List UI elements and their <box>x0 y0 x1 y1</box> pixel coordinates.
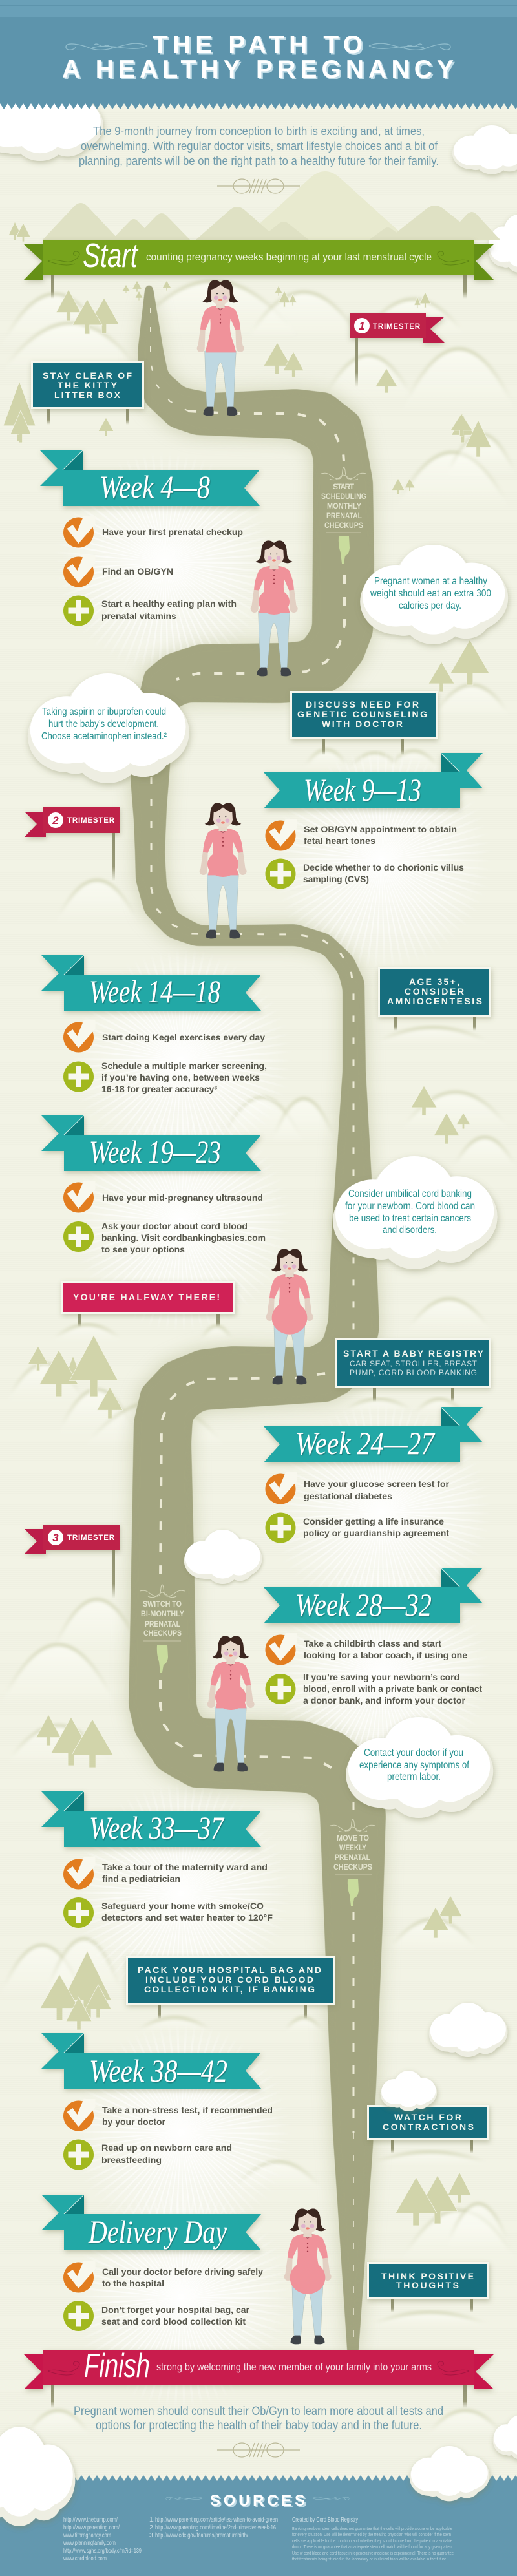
disclaimer: donor. There is no guarantee that an adequate stem cell match will be found for any given patient. <box>292 2544 454 2550</box>
icon: plus <box>63 1221 94 1252</box>
trimester 2 marker: 2 <box>52 814 59 827</box>
trimester 1 marker <box>350 313 445 387</box>
road note: weekly checkups: MOVE TO <box>337 1833 369 1842</box>
task <box>102 2266 263 2288</box>
person: week 9-13 <box>200 803 247 938</box>
trimester 3 marker: 3 <box>52 1532 59 1544</box>
banner: week 28-32: Week 28—32 <box>295 1587 432 1623</box>
icon: plus <box>63 1061 94 1092</box>
road note: bi-monthly checkups: BI-MONTHLY <box>141 1609 184 1618</box>
banner: week 4-8: Week 4—8 <box>100 469 210 505</box>
trees <box>3 222 491 2226</box>
icon: plus <box>265 858 296 889</box>
mountains <box>42 171 501 240</box>
panel: week 33-37 <box>41 1791 273 1928</box>
sign: positive thoughts: THOUGHTS <box>396 2280 459 2290</box>
person: week 4-8 <box>251 540 298 676</box>
sign: genetic counseling <box>291 692 437 755</box>
clouds: bottom <box>0 2415 517 2526</box>
divider ornament <box>217 2443 300 2457</box>
icon: check <box>265 1633 297 1665</box>
task: sampling (CVS) <box>303 874 369 884</box>
sources list: footnotes: http://www.cdc.gov/features/prematurebirth/ <box>155 2531 248 2539</box>
intro text: planning, parents will be on the right path to a healthy future for their family. <box>79 154 439 167</box>
task <box>101 1061 267 1094</box>
road note: monthly checkups: PRENATAL <box>326 511 362 520</box>
finish banner <box>24 2347 494 2408</box>
task: Have your mid-pregnancy ultrasound <box>102 1192 263 1203</box>
trimester 1 marker: 1 <box>359 320 365 332</box>
task: looking for a labor coach, if using one <box>304 1650 467 1660</box>
cloud: aspirin: hurt the baby’s development. <box>48 719 159 730</box>
clouds: near contractions sign <box>381 2003 507 2111</box>
title <box>62 31 454 83</box>
task: breastfeeding <box>101 2155 162 2165</box>
sign: amniocentesis <box>379 968 490 1031</box>
title: THE PATH TO <box>153 31 363 59</box>
header band <box>0 0 517 109</box>
road note: bi-monthly checkups <box>140 1585 185 1673</box>
task: to see your options <box>101 1244 185 1254</box>
person: week 28-32 <box>207 1636 255 1771</box>
sign: hospital bag: PACK YOUR HOSPITAL BAG AND <box>138 1965 321 1975</box>
task <box>101 1901 273 1923</box>
banner: week 33-37: Week 33—37 <box>89 1810 225 1846</box>
task: to the hospital <box>102 2278 164 2288</box>
banner: week 28-32 <box>264 1568 483 1623</box>
panel: delivery day <box>41 2195 263 2331</box>
task: Consider getting a life insurance <box>303 1516 444 1526</box>
task: if you’re having one, between weeks <box>101 1072 260 1082</box>
panel: week 4-8 <box>40 450 260 626</box>
sources list: footnotes: http://www.parenting.com/article/tea-when-to-avoid-green <box>155 2516 278 2524</box>
task: Ask your doctor about cord blood <box>101 1221 248 1231</box>
finish banner: strong by welcoming the new member of your family into your arms <box>156 2361 432 2373</box>
finish banner: Finish <box>84 2347 150 2385</box>
cloud: cord banking: be used to treat certain cancers <box>349 1213 471 1224</box>
icon: check <box>63 1181 96 1212</box>
panel: week 19-23 <box>41 1115 266 1254</box>
sign: genetic counseling: WITH DOCTOR <box>322 719 403 729</box>
task <box>303 1516 449 1538</box>
cloud: calories: calories per day. <box>399 600 461 611</box>
banner: week 24-27 <box>264 1407 483 1462</box>
banner: week 14-18: Week 14—18 <box>89 973 220 1009</box>
footer band <box>0 2475 517 2576</box>
task: Call your doctor before driving safely <box>102 2266 263 2277</box>
start banner: counting pregnancy weeks beginning at your last menstrual cycle <box>146 251 432 263</box>
task <box>303 1672 482 1705</box>
task: blood, enroll with a private bank or contact <box>303 1684 482 1694</box>
disclaimer <box>292 2516 454 2562</box>
sources list: footnotes: 1. <box>149 2516 155 2524</box>
sign: hospital bag: COLLECTION KIT, IF BANKING <box>144 1984 315 1994</box>
road note: monthly checkups: CHECKUPS <box>324 521 363 530</box>
road note: bi-monthly checkups: CHECKUPS <box>143 1629 182 1638</box>
closing text: Pregnant women should consult their Ob/Gyn to learn more about all tests and <box>74 2404 443 2418</box>
task: Take a non-stress test, if recommended <box>102 2105 273 2115</box>
sign: baby registry: START A BABY REGISTRY <box>343 1348 484 1358</box>
task: Decide whether to do chorionic villus <box>303 862 464 872</box>
sign: amniocentesis: CONSIDER <box>405 986 464 997</box>
banner: week 38-42 <box>41 2033 261 2089</box>
sources list: footnotes: 3. <box>149 2531 155 2539</box>
banner: week 19-23: Week 19—23 <box>89 1134 221 1170</box>
task: Don’t forget your hospital bag, car <box>101 2305 250 2315</box>
icon: check <box>63 516 96 548</box>
panel: week 9-13 <box>264 753 483 889</box>
cloud: preterm labor: preterm labor. <box>387 1771 441 1782</box>
sources list: websites: http://www.thebump.com/ <box>63 2516 118 2524</box>
sources list: footnotes <box>149 2516 278 2539</box>
icon: check <box>63 1857 96 1890</box>
cloud: calories: Pregnant women at a healthy <box>374 576 487 587</box>
sign: contractions: WATCH FOR <box>394 2112 461 2122</box>
road note: weekly checkups: CHECKUPS <box>333 1863 372 1872</box>
trimester 1 marker: TRIMESTER <box>373 323 421 331</box>
task: If you’re saving your newborn’s cord <box>303 1672 459 1682</box>
sources list: websites: http://www.parenting.com/ <box>63 2524 120 2531</box>
title: A HEALTHY PREGNANCY <box>62 56 454 83</box>
sign: baby registry: PUMP, CORD BLOOD BANKING <box>350 1368 477 1377</box>
sunbursts behind week lists <box>58 456 488 2404</box>
task: Schedule a multiple marker screening, <box>101 1061 267 1071</box>
task <box>304 1638 467 1660</box>
task: Have your first prenatal checkup <box>102 527 243 537</box>
task <box>101 2142 232 2165</box>
icon: plus <box>63 2139 94 2170</box>
banner: week 19-23 <box>41 1115 261 1171</box>
cloud: cord banking <box>333 1156 498 1269</box>
person: start <box>197 280 244 416</box>
road note: monthly checkups <box>321 467 366 564</box>
trimester 2 marker: TRIMESTER <box>67 817 115 825</box>
sign: amniocentesis: AGE 35+, <box>409 977 459 987</box>
task <box>102 1862 268 1884</box>
cloud: aspirin: Taking aspirin or ibuprofen could <box>42 706 166 717</box>
road dashes <box>151 308 353 2343</box>
sign: hospital bag <box>127 1957 333 2019</box>
road note: bi-monthly checkups: PRENATAL <box>145 1620 180 1629</box>
road note: weekly checkups: PRENATAL <box>335 1853 370 1862</box>
sign: hospital bag: INCLUDE YOUR CORD BLOOD <box>145 1974 313 1985</box>
banner: week 33-37 <box>41 1791 261 1847</box>
task: banking. Visit cordbankingbasics.com <box>101 1232 266 1243</box>
task: Start a healthy eating plan with <box>101 598 237 609</box>
banner: week 38-42: Week 38—42 <box>89 2053 227 2089</box>
intro text: The 9-month journey from conception to birth is exciting and, at times, <box>93 124 425 138</box>
sources heading <box>166 2492 349 2509</box>
cloud: cord banking: for your newborn. Cord blood can <box>345 1201 475 1212</box>
disclaimer: Use of cord blood and cord tissue in regenerative medicine is experimental. There is no guarantee <box>292 2550 454 2556</box>
task <box>304 1479 450 1501</box>
sources list: websites <box>63 2516 142 2562</box>
panel: week 14-18 <box>41 955 267 1094</box>
icon: plus <box>265 1512 296 1543</box>
banner: week 9-13 <box>264 753 483 808</box>
cloud: aspirin <box>28 673 189 783</box>
title flourish left <box>66 43 147 50</box>
task: Start doing Kegel exercises every day <box>102 1032 265 1042</box>
task: by your doctor <box>102 2117 166 2127</box>
clouds: top <box>0 84 517 273</box>
task: Take a childbirth class and start <box>304 1638 441 1649</box>
road note: monthly checkups: MONTHLY <box>327 501 361 511</box>
cloud: calories: weight should eat an extra 300 <box>370 588 491 599</box>
sign: contractions: CONTRACTIONS <box>383 2122 474 2132</box>
task: fetal heart tones <box>304 836 375 846</box>
divider ornament <box>217 179 300 193</box>
disclaimer: Banking newborn stem cells does not guarantee that the cells will provide a cure or be applicable <box>292 2526 452 2531</box>
road note: monthly checkups: SCHEDULING <box>321 492 366 501</box>
sign: genetic counseling: GENETIC COUNSELING <box>297 709 427 719</box>
task: find a pediatrician <box>102 1874 180 1884</box>
intro text <box>79 124 439 167</box>
task: prenatal vitamins <box>101 611 176 621</box>
panel: week 28-32 <box>264 1568 483 1705</box>
task: Take a tour of the maternity ward and <box>102 1862 268 1872</box>
icon: check <box>63 1020 96 1052</box>
task: Safeguard your home with smoke/CO <box>101 1901 264 1911</box>
sources list: websites: www.cordblood.com <box>63 2555 107 2562</box>
sign: kitty litter: STAY CLEAR OF <box>43 370 132 381</box>
icon: plus <box>63 596 94 626</box>
sources list: footnotes: 2. <box>149 2524 155 2531</box>
cloud: calories <box>360 545 508 644</box>
cloud: cord banking: Consider umbilical cord banking <box>348 1188 472 1199</box>
banner: delivery day: Delivery Day <box>88 2213 227 2250</box>
sources list: websites: http://www.sghs.org/body.cfm?id=139 <box>63 2547 142 2555</box>
icon: plus <box>265 1674 296 1704</box>
icon: check <box>63 2261 96 2293</box>
sign: halfway: YOU’RE HALFWAY THERE! <box>73 1292 220 1302</box>
task <box>102 2105 273 2127</box>
sources list: websites: www.planningfamily.com <box>63 2539 116 2547</box>
sources list: websites: www.fitpregnancy.com <box>63 2531 111 2539</box>
closing text <box>74 2404 443 2433</box>
banner: week 14-18 <box>41 955 261 1011</box>
person: delivery <box>284 2208 332 2344</box>
disclaimer: for every situation. Use will be determined by the treating physician who will consider if the stem <box>292 2531 451 2537</box>
disclaimer: Created by Cord Blood Registry <box>292 2516 359 2524</box>
trimester 2 marker <box>25 807 120 881</box>
road shadow <box>129 292 386 2352</box>
task: policy or guardianship agreement <box>303 1528 449 1538</box>
icon: check <box>265 819 297 850</box>
sign: positive thoughts <box>368 2263 489 2312</box>
closing text: options for protecting the health of their baby today and in the future. <box>96 2418 422 2433</box>
disclaimer: that treatments being studied in the laboratory or in clinical trials will be available in the future. <box>292 2556 447 2562</box>
icon: plus <box>63 1897 94 1928</box>
panel: week 24-27 <box>264 1407 483 1543</box>
disclaimer: cells are applicable for the condition and whether they should come from the patient or a suitable <box>292 2538 452 2544</box>
sign: kitty litter: THE KITTY <box>58 380 118 390</box>
icon: plus <box>63 2301 94 2331</box>
sign: positive thoughts: THINK POSITIVE <box>381 2271 474 2281</box>
road note: weekly checkups <box>330 1819 375 1906</box>
task <box>101 598 237 621</box>
trimester 3 marker: TRIMESTER <box>67 1534 115 1542</box>
task <box>304 824 457 846</box>
task <box>101 2305 250 2327</box>
icon: check <box>265 1472 297 1504</box>
intro text: overwhelming. With regular doctor visits, smart lifestyle choices and a bit of <box>81 139 438 153</box>
banner: week 9-13: Week 9—13 <box>304 772 421 808</box>
panel: week 38-42 <box>41 2033 273 2170</box>
road note: bi-monthly checkups: SWITCH TO <box>143 1599 182 1609</box>
sign: kitty litter: LITTER BOX <box>54 390 121 400</box>
person: halfway <box>266 1249 313 1384</box>
cloud: cord banking: and disorders. <box>383 1225 437 1236</box>
task: Read up on newborn care and <box>101 2142 232 2153</box>
cloud: preterm labor: Contact your doctor if you <box>364 1747 463 1758</box>
cloud: preterm labor: experience any symptoms of <box>359 1760 470 1771</box>
task: a donor bank, and inform your doctor <box>303 1695 466 1705</box>
task: gestational diabetes <box>304 1491 392 1501</box>
sign: baby registry: CAR SEAT, STROLLER, BREAST <box>350 1359 478 1368</box>
trimester 3 marker <box>25 1525 120 1598</box>
banner: week 24-27: Week 24—27 <box>295 1425 436 1461</box>
banner: week 4-8 <box>40 450 260 506</box>
task: Have your glucose screen test for <box>304 1479 450 1489</box>
task: Set OB/GYN appointment to obtain <box>304 824 457 834</box>
banner: delivery day <box>41 2195 261 2250</box>
start banner: Start <box>83 237 139 275</box>
task: 16-18 for greater accuracy³ <box>101 1084 217 1094</box>
road note: weekly checkups: WEEKLY <box>339 1843 366 1852</box>
small cloud <box>184 1530 262 1584</box>
start banner <box>24 237 494 299</box>
cloud: aspirin: Choose acetaminophen instead.² <box>41 731 167 742</box>
task <box>303 862 464 884</box>
sign: amniocentesis: AMNIOCENTESIS <box>387 996 482 1006</box>
sign: contractions <box>368 2106 489 2153</box>
task: Find an OB/GYN <box>102 566 173 576</box>
task: seat and cord blood collection kit <box>101 2316 246 2327</box>
icon: check <box>63 555 96 587</box>
sign: halfway <box>62 1282 234 1327</box>
road <box>129 284 386 2359</box>
sign: kitty litter <box>32 362 143 425</box>
sources list: footnotes: http://www.parenting.com/timeline/2nd-trimester-week-16 <box>155 2524 276 2531</box>
icon: check <box>63 2099 96 2131</box>
road note: monthly checkups: START <box>333 482 355 491</box>
sources heading: SOURCES <box>210 2492 305 2509</box>
sign: genetic counseling: DISCUSS NEED FOR <box>306 699 419 710</box>
sign: baby registry <box>336 1339 490 1402</box>
task <box>101 1221 266 1254</box>
cloud: preterm labor <box>346 1717 493 1818</box>
title flourish right <box>369 43 450 50</box>
task: detectors and set water heater to 120°F <box>101 1912 273 1923</box>
